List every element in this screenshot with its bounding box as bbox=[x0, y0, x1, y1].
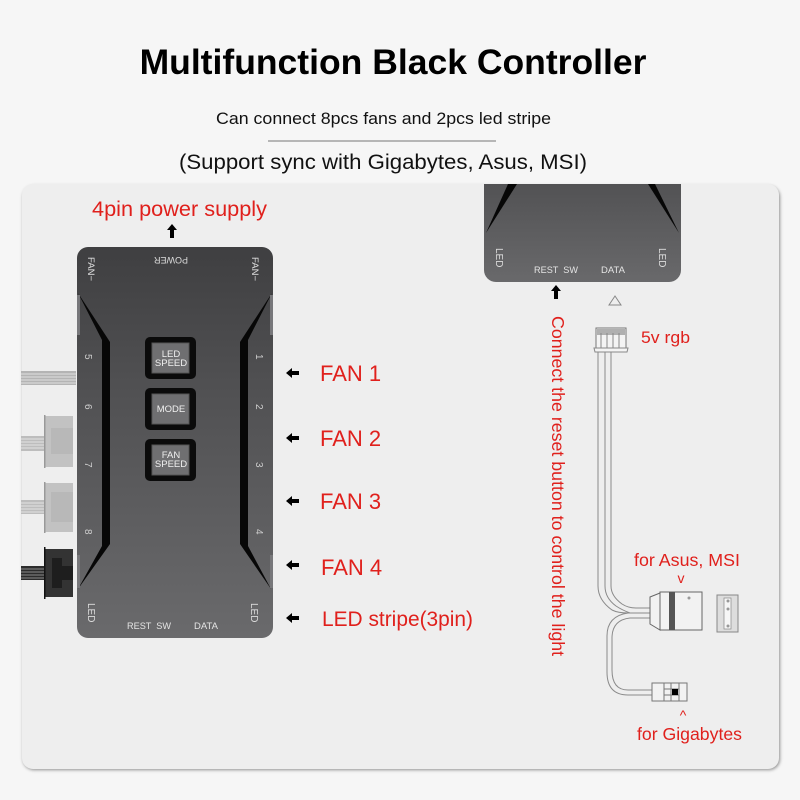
button: mode: MODE bbox=[157, 404, 185, 415]
controller board: detail: REST SW bbox=[534, 265, 578, 276]
USB header plug bbox=[650, 592, 702, 630]
label: fan 1: FAN 1 bbox=[320, 361, 381, 386]
controller board: detail bbox=[484, 184, 681, 282]
right black rail bbox=[240, 293, 272, 589]
button: fan speed bbox=[145, 439, 196, 481]
arrow: fan 4 bbox=[286, 560, 299, 570]
label: fan 2: FAN 2 bbox=[320, 426, 381, 451]
3-pin plug bbox=[652, 683, 687, 701]
connector cable: fan 5 bbox=[21, 371, 76, 385]
button: LED speed bbox=[145, 337, 196, 379]
connector: fan 7 bbox=[21, 482, 73, 533]
controller board: main: DATA bbox=[194, 621, 219, 632]
left black rail bbox=[78, 293, 110, 589]
arrow: fan 2 bbox=[286, 433, 299, 443]
subtitle: Can connect 8pcs fans and 2pcs led stripe bbox=[216, 110, 551, 128]
caret: Gigabytes: ^ bbox=[680, 707, 687, 723]
controller board: main: LED bbox=[85, 603, 96, 622]
support note: (Support sync with Gigabytes, Asus, MSI) bbox=[179, 151, 587, 174]
label: 4pin power supply: 4pin power supply bbox=[92, 198, 268, 221]
vertical label: reset: Connect the reset button to control the light bbox=[548, 316, 568, 656]
arrow: power up bbox=[167, 224, 177, 238]
arrow: fan 1 bbox=[286, 368, 299, 378]
button: fan speed: FAN bbox=[162, 450, 180, 461]
connector: fan 6 bbox=[21, 415, 73, 468]
controller board: main: FAN− bbox=[85, 257, 96, 281]
5v rgb connector and cable bbox=[594, 328, 652, 695]
controller board: main: 1 bbox=[253, 354, 264, 360]
arrow: reset bbox=[551, 285, 561, 299]
connector: fan 8 bbox=[21, 547, 73, 599]
controller board: main bbox=[77, 247, 273, 638]
label: for Asus, MSI: for Asus, MSI bbox=[634, 550, 740, 570]
controller board: main: 7 bbox=[82, 462, 93, 468]
label: LED stripe: LED stripe(3pin) bbox=[322, 608, 473, 631]
panel: background bbox=[22, 184, 779, 769]
controller board: main: 3 bbox=[253, 462, 264, 468]
caret: Asus: v bbox=[678, 570, 684, 586]
controller board: main: 6 bbox=[82, 404, 93, 410]
label: for Gigabytes: for Gigabytes bbox=[637, 724, 742, 744]
triangle marker bbox=[609, 296, 621, 305]
controller board: main: FAN− bbox=[249, 257, 260, 281]
label: fan 3: FAN 3 bbox=[320, 489, 381, 514]
arrow: fan 3 bbox=[286, 496, 299, 506]
arrow: LED stripe bbox=[286, 613, 299, 623]
controller board: detail: DATA bbox=[601, 265, 626, 276]
button: LED speed: LED bbox=[162, 349, 180, 360]
board labels: POWER bbox=[154, 255, 188, 265]
controller board: main: 8 bbox=[82, 529, 93, 535]
controller board: main: 4 bbox=[253, 529, 264, 535]
title: Multifunction Black Controller bbox=[140, 42, 647, 82]
button: LED speed: SPEED bbox=[155, 358, 187, 369]
controller board: main: 5 bbox=[82, 354, 93, 360]
button: mode bbox=[145, 388, 196, 430]
label: 5v rgb: 5v rgb bbox=[641, 328, 690, 347]
controller board: main: REST SW bbox=[127, 621, 171, 632]
controller board: main: 2 bbox=[253, 404, 264, 410]
button: fan speed: SPEED bbox=[155, 459, 187, 470]
side lighter strips bbox=[77, 295, 80, 335]
USB socket bbox=[717, 595, 738, 632]
controller board: main: LED bbox=[248, 603, 259, 622]
controller board: detail: LED bbox=[493, 248, 504, 267]
label: fan 4: FAN 4 bbox=[321, 555, 382, 580]
controller board: detail: LED bbox=[656, 248, 667, 267]
